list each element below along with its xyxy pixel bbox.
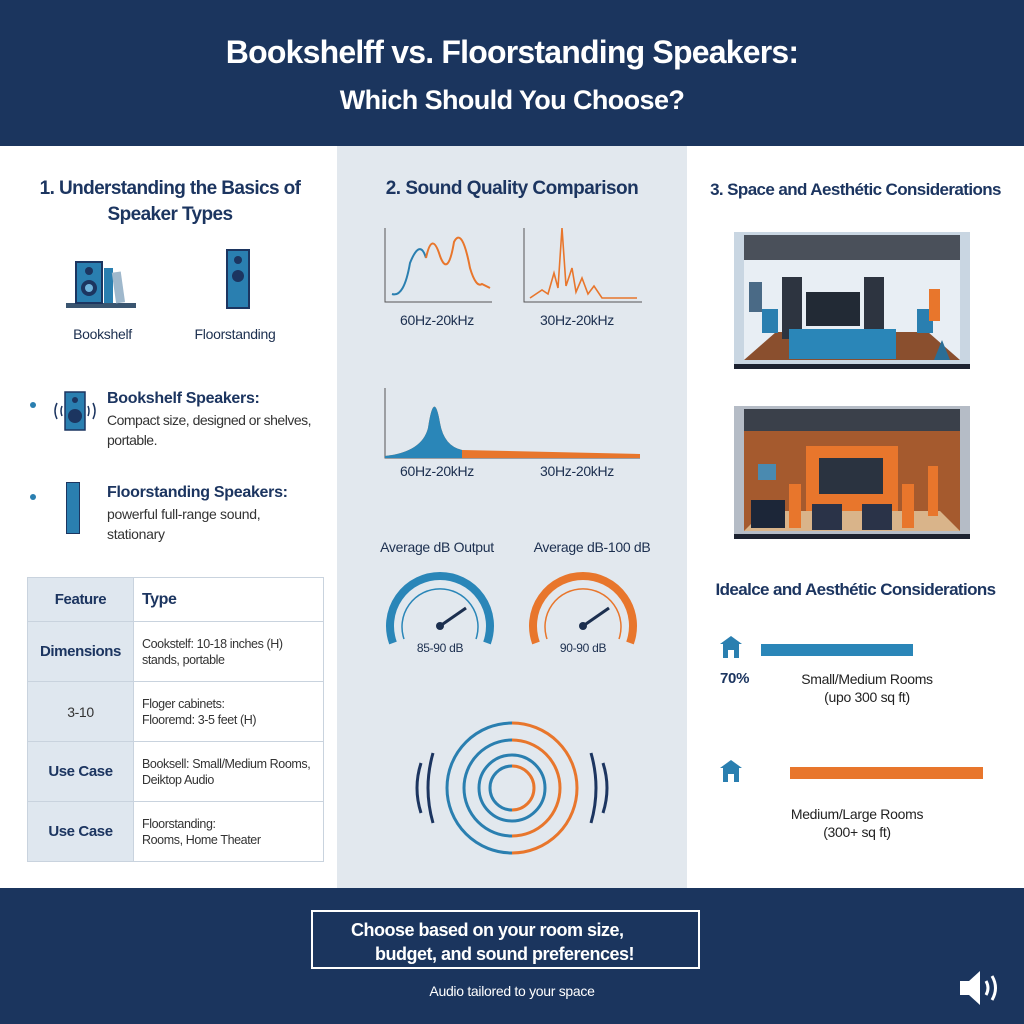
panel: sound quality: 85-90 dB (417, 641, 463, 655)
table: Floorstanding: (142, 816, 216, 830)
chart: frequency 1 (384, 228, 642, 302)
table: Flooremd: 3-5 feet (H) (142, 712, 256, 726)
heading 3: 3. Space and Aesthétic Considerations (710, 180, 1001, 199)
heading 2: 2. Sound Quality Comparison (386, 178, 638, 199)
bar: large rooms (720, 760, 983, 840)
panel: sound quality: 60Hz-20kHz (400, 463, 474, 479)
label avg dB: Average dB Output (380, 539, 494, 555)
callout box (311, 910, 700, 969)
panel: sound quality: 30Hz-20kHz (540, 463, 614, 479)
bar: large rooms: Medium/Large Rooms (791, 806, 923, 822)
label floorstanding: Floorstanding (195, 326, 275, 342)
table: Cookstelf: 10-18 inches (H) (142, 636, 283, 650)
title: Bookshelff vs. Floorstanding Speakers: (226, 34, 798, 70)
table: Feature (55, 590, 106, 608)
illustration: home theater (734, 406, 970, 539)
bullet bookshelf (30, 390, 311, 448)
bar: small rooms: Small/Medium Rooms (801, 671, 933, 687)
bullet floorstanding (30, 482, 288, 542)
header (0, 0, 1024, 146)
table: Rooms, Home Theater (142, 832, 261, 846)
callout box: Choose based on your room size, (351, 920, 624, 940)
panel: sound quality: 60Hz-20kHz (400, 312, 474, 328)
table: Deiktop Audio (142, 772, 214, 786)
illustration: living room (734, 232, 970, 369)
table: Floger cabinets: (142, 696, 225, 710)
icon: bookshelf speaker (66, 261, 136, 308)
bullet bookshelf: Compact size, designed or shelves, (107, 412, 311, 428)
footer (0, 888, 1024, 1024)
gauge 2 (529, 572, 637, 644)
bar: small rooms (720, 636, 933, 705)
panel: sound quality: 30Hz-20kHz (540, 312, 614, 328)
table: Use Case (48, 762, 113, 780)
panel: sound quality: 90-90 dB (560, 641, 606, 655)
table: Dimensions (40, 642, 121, 660)
panel: middle background (337, 146, 687, 888)
heading 1: 1. Understanding the Basics of Speaker Types (40, 178, 300, 225)
table: 3-10 (67, 704, 94, 720)
heading: ideal: Idealce and Aesthétic Considerations (715, 580, 996, 599)
gauge 1 (386, 572, 494, 644)
bullet bookshelf: portable. (107, 432, 157, 448)
table: Use Case (48, 822, 113, 840)
panel: sound quality: Average dB-100 dB (534, 539, 650, 555)
table: stands, portable (142, 652, 225, 666)
tagline: Audio tailored to your space (429, 983, 595, 999)
bar: large rooms: (300+ sq ft) (823, 824, 891, 840)
bullet floorstanding: stationary (107, 526, 165, 542)
table (27, 577, 324, 862)
bar: small rooms: (upo 300 sq ft) (824, 689, 910, 705)
table: Booksell: Small/Medium Rooms, (142, 756, 310, 770)
icon: speaker (960, 971, 997, 1005)
icon: floorstanding speaker (226, 249, 250, 309)
label bookshelf: Bookshelf (73, 326, 132, 342)
callout box: budget, and sound preferences! (375, 944, 634, 964)
table: Type (142, 590, 177, 608)
chart: frequency 2 (384, 388, 640, 458)
bullet floorstanding: powerful full-range sound, (107, 506, 260, 522)
bullet bookshelf: Bookshelf Speakers: (107, 390, 260, 407)
subtitle: Which Should You Choose? (340, 85, 684, 115)
bullet floorstanding: Floorstanding Speakers: (107, 484, 288, 501)
icon: sound waves (416, 722, 608, 854)
panel: basics (27, 178, 324, 862)
panel: space (710, 180, 1001, 840)
panel: sound quality (380, 178, 650, 854)
bar: small rooms: 70% (720, 670, 749, 687)
